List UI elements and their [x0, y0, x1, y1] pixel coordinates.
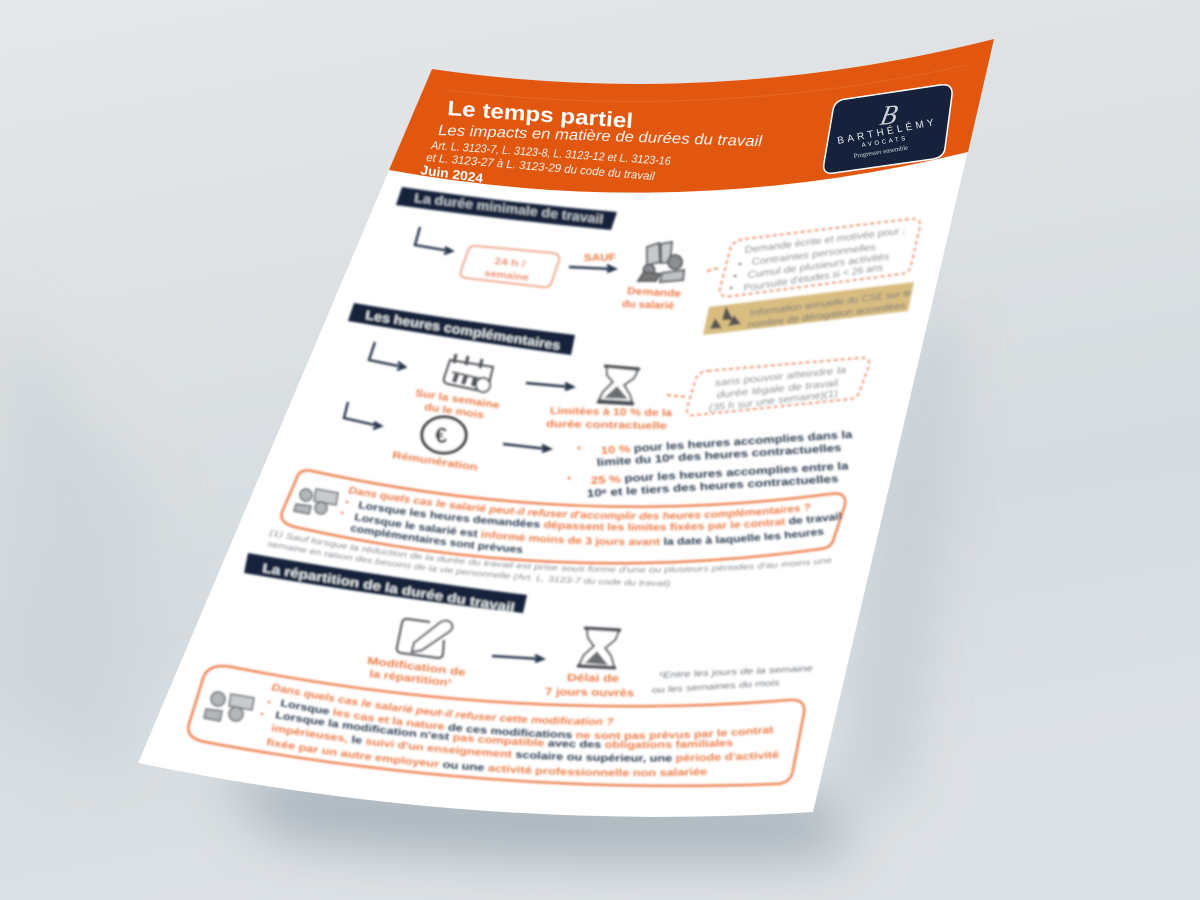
dashed callout: request [707, 219, 920, 296]
label: modification: la répartition¹ [369, 668, 453, 689]
article references line 2: et L. 3123-27 à L. 3123-29 du code du travail [426, 152, 655, 183]
label: limitées à 10 % [546, 406, 673, 432]
elbow arrow 2 [369, 342, 405, 370]
icon: employees [294, 489, 338, 514]
bullet line 1: Lorsque les cas et la nature de ces modifications ne sont pas prévus par le contrat [279, 698, 774, 742]
article references line 1: Art. L. 3123-7, L. 3123-8, L. 3123-12 et L. 3123-16 [430, 140, 672, 168]
section: durée minimale [396, 187, 920, 335]
heading banner 1: La durée minimale de travail [414, 191, 604, 226]
section: heures complémentaires [266, 302, 872, 588]
bullet line 1: Lorsque les heures demandées dépassent les limites fixées par le contrat de travail [357, 500, 843, 533]
label: délai [545, 672, 634, 700]
label: délai: Délai de [567, 672, 619, 685]
arrow [492, 655, 543, 662]
label: limitées à 10 %: Limitées à 10 % de la [550, 406, 673, 419]
gold callout: CSE information: nombre de dérogation accordées [747, 300, 907, 330]
panel heading: Dans quels cas le salarié peut-il refuser cette modification ? [270, 682, 615, 726]
label: demande du salarié [622, 286, 682, 312]
list: remuneration rates: 25 % pour les heures accomplies entre la [590, 460, 849, 487]
heading banner 3: La répartition de la durée du travail [262, 561, 516, 615]
gold callout: CSE information [703, 282, 914, 335]
header band [389, 39, 994, 193]
logo name: BARTHÉLÉMY [836, 115, 935, 147]
list: remuneration rates: limite du 10ᵉ des heures contractuelles [596, 442, 842, 469]
dashed callout: request: Contraintes personnelles [751, 242, 877, 268]
label: rémunération: Rémunération [392, 450, 478, 474]
dashed callout: request: Demande écrite et motivée pour : [744, 225, 907, 256]
list: remuneration rates: 10ᵉ et le tiers des heures contractuelles [586, 473, 839, 500]
label: sur la semaine [415, 388, 501, 421]
icon: pencil and paper [397, 619, 452, 658]
note: ou les semaines du mois [652, 677, 781, 695]
note [652, 663, 813, 695]
date: Juin 2024 [420, 162, 485, 186]
icon: euro coin [422, 417, 466, 453]
bullet line 3: impérieuses, le suivi d'un enseignement scolaire ou supérieur, une période d'activité [270, 722, 780, 765]
arrow [503, 444, 550, 452]
icon: employee request [638, 242, 684, 282]
box: 24 h: 24 h / [494, 256, 526, 270]
dashed callout: durée légale [667, 358, 869, 415]
page content [186, 186, 922, 789]
page shadow [0, 300, 950, 853]
dashed callout: durée légale: sans pouvoir atteindre la [714, 365, 847, 389]
elbow arrow 3 [344, 402, 381, 429]
list: remuneration rates [568, 429, 853, 500]
dashed callout: durée légale: durée légale de travail [716, 378, 840, 401]
dashed callout: durée légale: (35 h sur une semaine)(1) [708, 388, 839, 414]
icon: hourglass [597, 366, 640, 404]
footnote: semaine en raison des besoins de la vie personnelle (Art. L. 3123-7 du code du travail) [266, 541, 672, 588]
label: sur la semaine: Sur la semaine [415, 388, 501, 412]
arrow [526, 383, 573, 390]
title: Le temps partiel [447, 97, 634, 133]
arrow [569, 265, 615, 272]
heading banner 3 [244, 553, 527, 615]
dashed callout: request: Poursuite d'études si < 26 ans [743, 262, 884, 294]
icon: euro coin: € [435, 423, 447, 448]
icon: hourglass [577, 628, 621, 668]
note: ¹Entre les jours de la semaine [659, 663, 813, 680]
bullet line 2: Lorsque le salarié est informé moins de 3 jours avant la date à laquelle les heures [353, 512, 825, 548]
label: sur la semaine: du le mois [424, 402, 485, 421]
label: SAUF: SAUF [584, 252, 616, 264]
label: demande du salarié: Demande [627, 286, 682, 300]
heading banner 2: Les heures complémentaires [365, 308, 561, 353]
heading banner 1 [396, 187, 617, 230]
box: 24 h: semaine [484, 268, 530, 284]
logo [824, 85, 952, 173]
logo tagline: Progresser ensemble [853, 144, 909, 160]
subtitle: Les impacts en matière de durées du travail [438, 122, 763, 150]
heading banner 2 [348, 303, 575, 355]
label: modification [367, 655, 467, 689]
panel: refusal of extra hours [278, 468, 848, 566]
gold callout: CSE information: Information annuelle du CSE sur le [749, 288, 912, 318]
logo subname: AVOCATS [861, 136, 906, 149]
label: limitées à 10 %: durée contractuelle [546, 419, 668, 432]
panel heading: Dans quels cas le salarié peut-il refuser d'accomplir des heures complémentaires ? [347, 485, 812, 522]
list: remuneration rates: 10 % pour les heures accomplies dans la [600, 429, 853, 457]
elbow arrow 1 [415, 227, 452, 254]
label: modification: Modification de [367, 655, 467, 679]
sheet of paper [138, 39, 994, 817]
label: délai: 7 jours ouvrés [545, 686, 634, 700]
icon: calendar [444, 354, 493, 392]
icon: employees [204, 692, 254, 721]
footnote: (1) Sauf lorsque la réduction de la durée du travail est prise sous forme d'une ou plusieurs périodes d'au moins une [268, 529, 832, 574]
box: 24 h [461, 246, 559, 287]
bullet line 4: fixée par un autre employeur ou une activité professionnelle non salariée [266, 736, 708, 778]
panel: refusal of modification [186, 663, 807, 789]
dashed callout: request: Cumul de plusieurs activités [747, 251, 890, 281]
logo monogram: B [878, 98, 901, 131]
bullet line 3: complémentaires sont prévues [349, 524, 524, 555]
label: demande du salarié: du salarié [622, 299, 675, 312]
section: répartition [186, 552, 814, 789]
bullet line 2: Lorsque la modification n'est pas compatible avec des obligations familiales [274, 710, 734, 752]
